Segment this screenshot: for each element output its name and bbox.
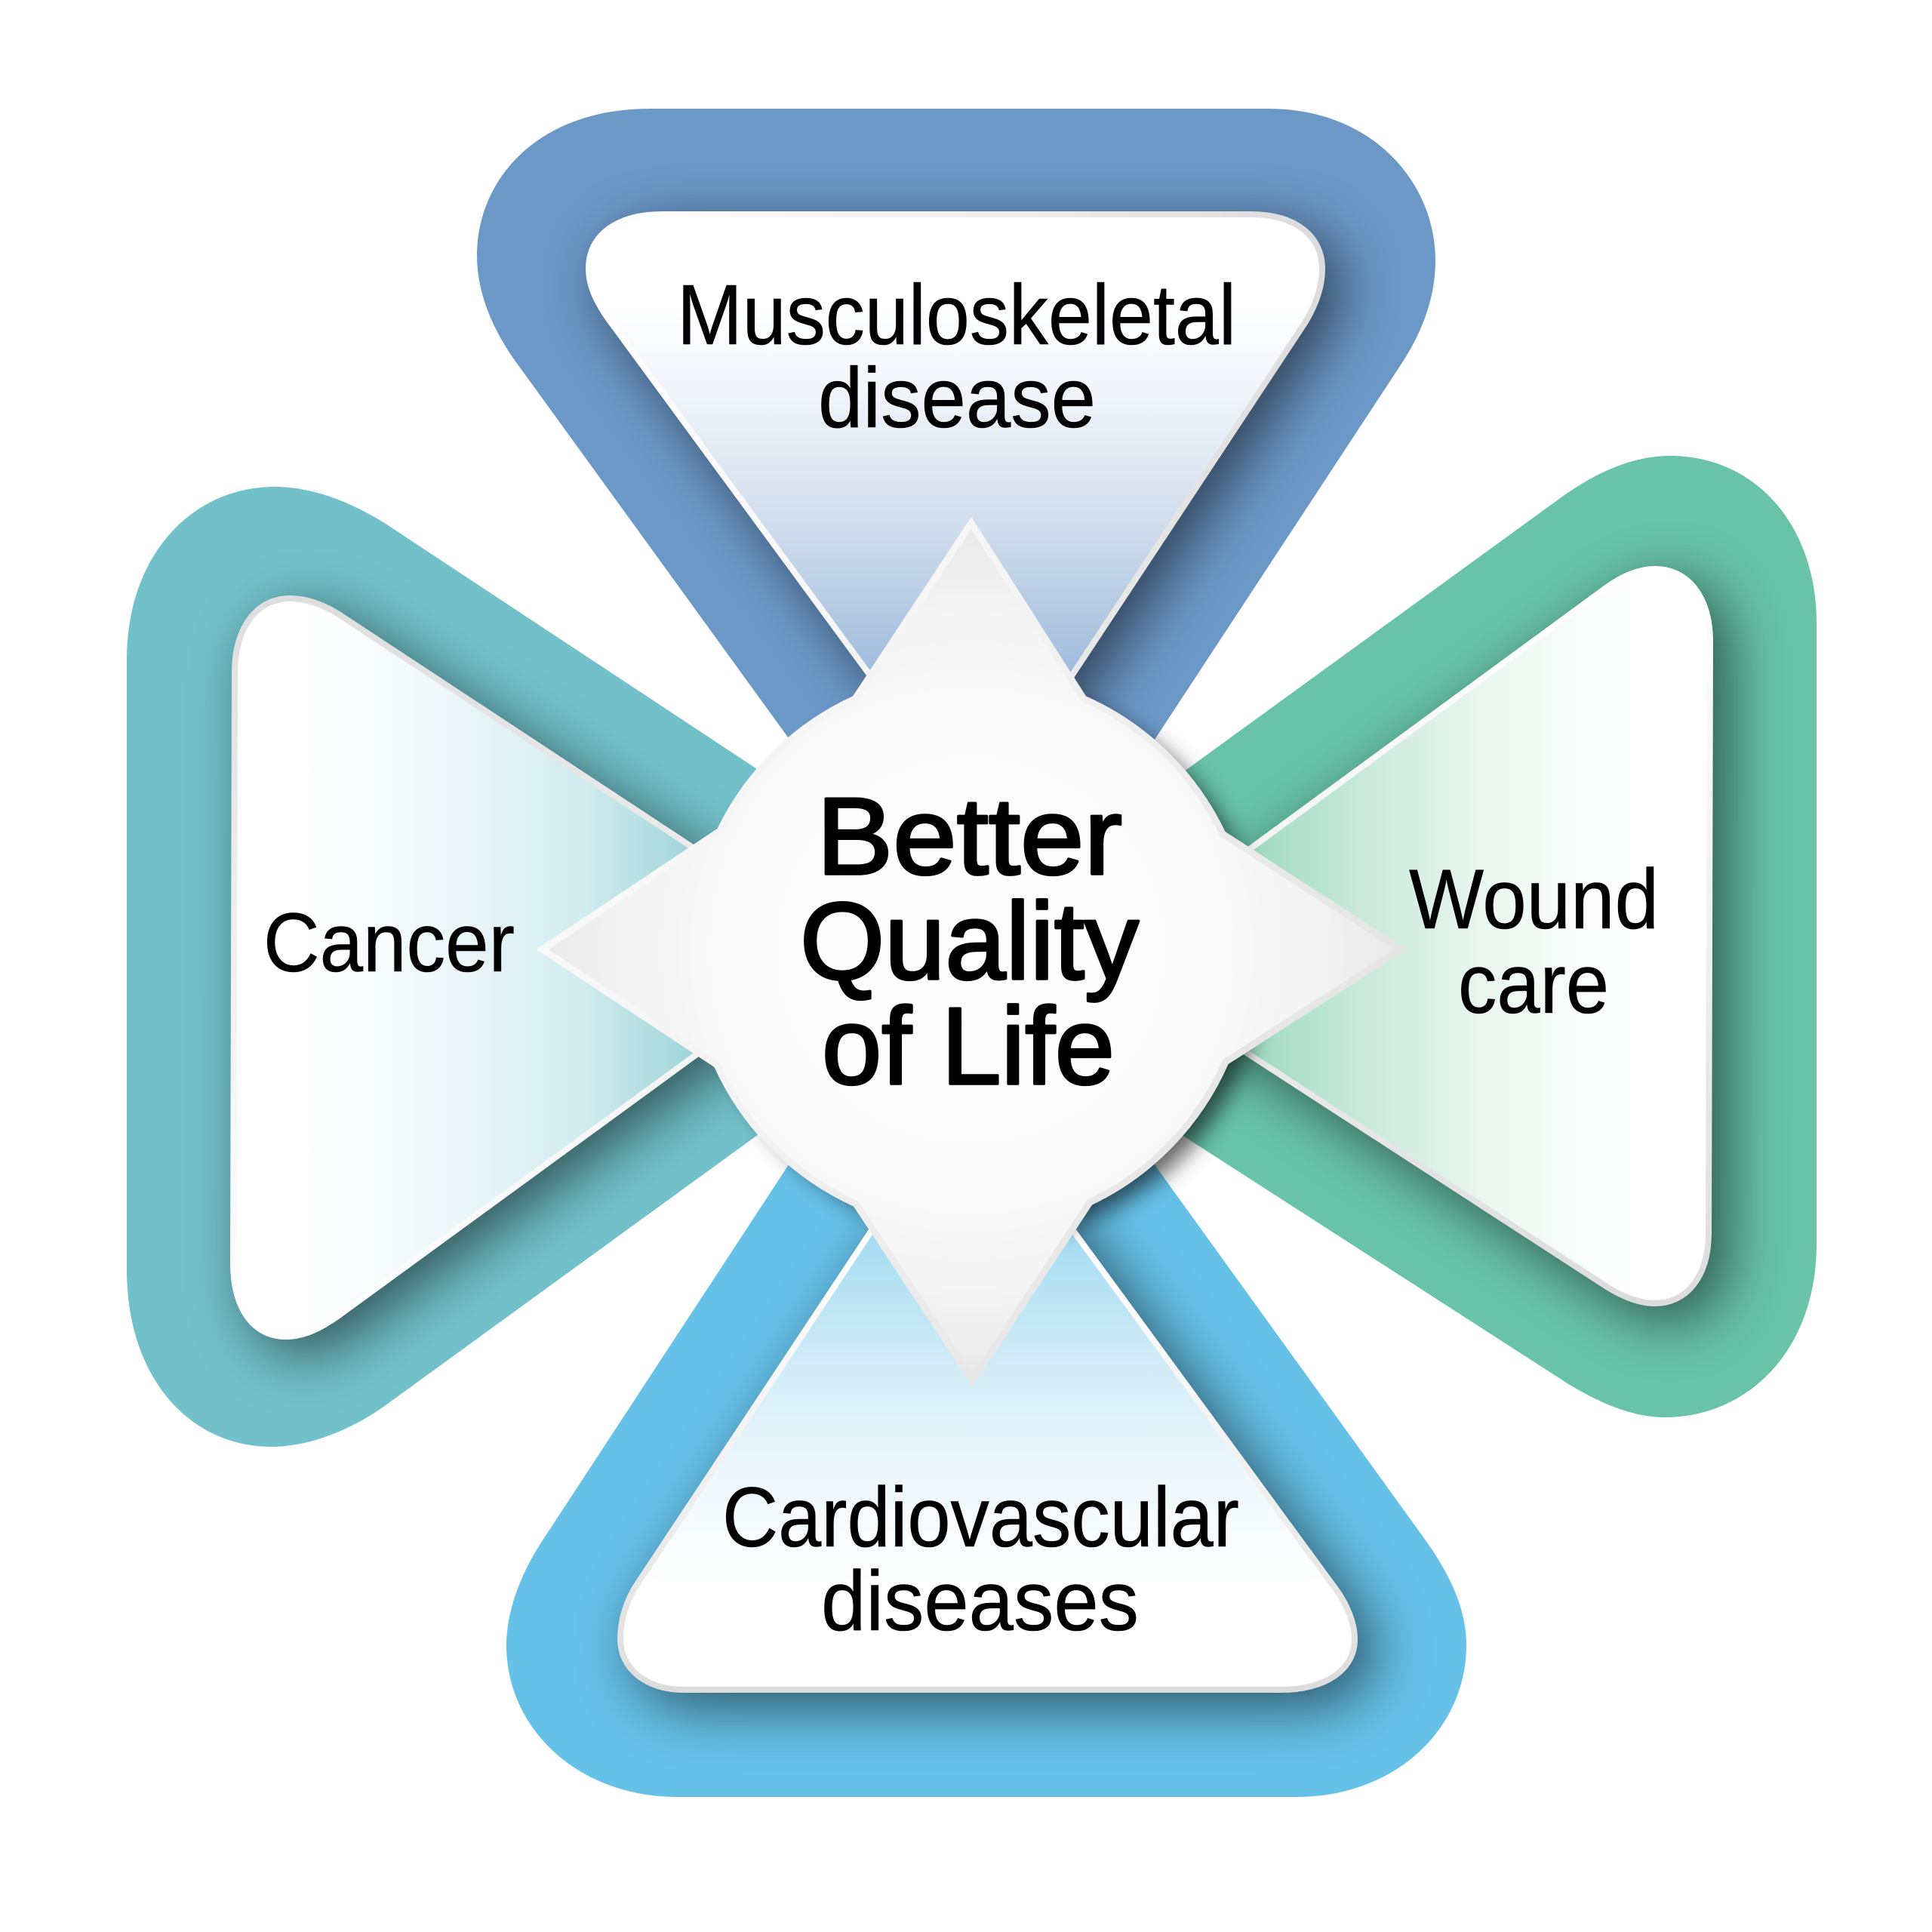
panel: cancer — [127, 487, 758, 1447]
panel: musculoskeletal disease — [477, 109, 1435, 792]
label: musculoskeletal disease: disease — [818, 350, 1096, 445]
band: musculoskeletal outer shape — [477, 109, 1435, 792]
shadow under center circle — [712, 688, 1262, 1238]
band: cancer outer shape — [127, 487, 830, 1447]
band: cardiovascular outer shape — [506, 1109, 1466, 1797]
heading: better quality of life: Better — [817, 775, 1122, 897]
label: cancer: Cancer — [263, 897, 515, 989]
panel: wound care — [1183, 456, 1817, 1417]
label: wound care: care — [1458, 937, 1609, 1031]
card: cancer inner triangle — [233, 598, 755, 1337]
label: musculoskeletal disease: Musculoskeletal — [677, 267, 1236, 362]
label: cardiovascular diseases: diseases — [821, 1554, 1139, 1648]
heading: better quality of life: Quality — [800, 880, 1139, 1002]
label: wound care: Wound — [1409, 852, 1659, 946]
label: cardiovascular diseases: Cardiovascular — [722, 1470, 1239, 1564]
infographic: better quality of life — [127, 109, 1817, 1797]
center badge: better quality of life — [543, 523, 1401, 1380]
card: musculoskeletal inner triangle — [589, 214, 1322, 755]
card: wound care inner triangle — [1185, 569, 1710, 1303]
panel: cardiovascular diseases — [506, 1109, 1466, 1797]
heading: better quality of life: of Life — [822, 985, 1115, 1107]
card: cardiovascular inner triangle — [620, 1147, 1355, 1690]
band: wound care outer shape — [1109, 456, 1817, 1417]
four-point star with circle — [543, 523, 1401, 1380]
